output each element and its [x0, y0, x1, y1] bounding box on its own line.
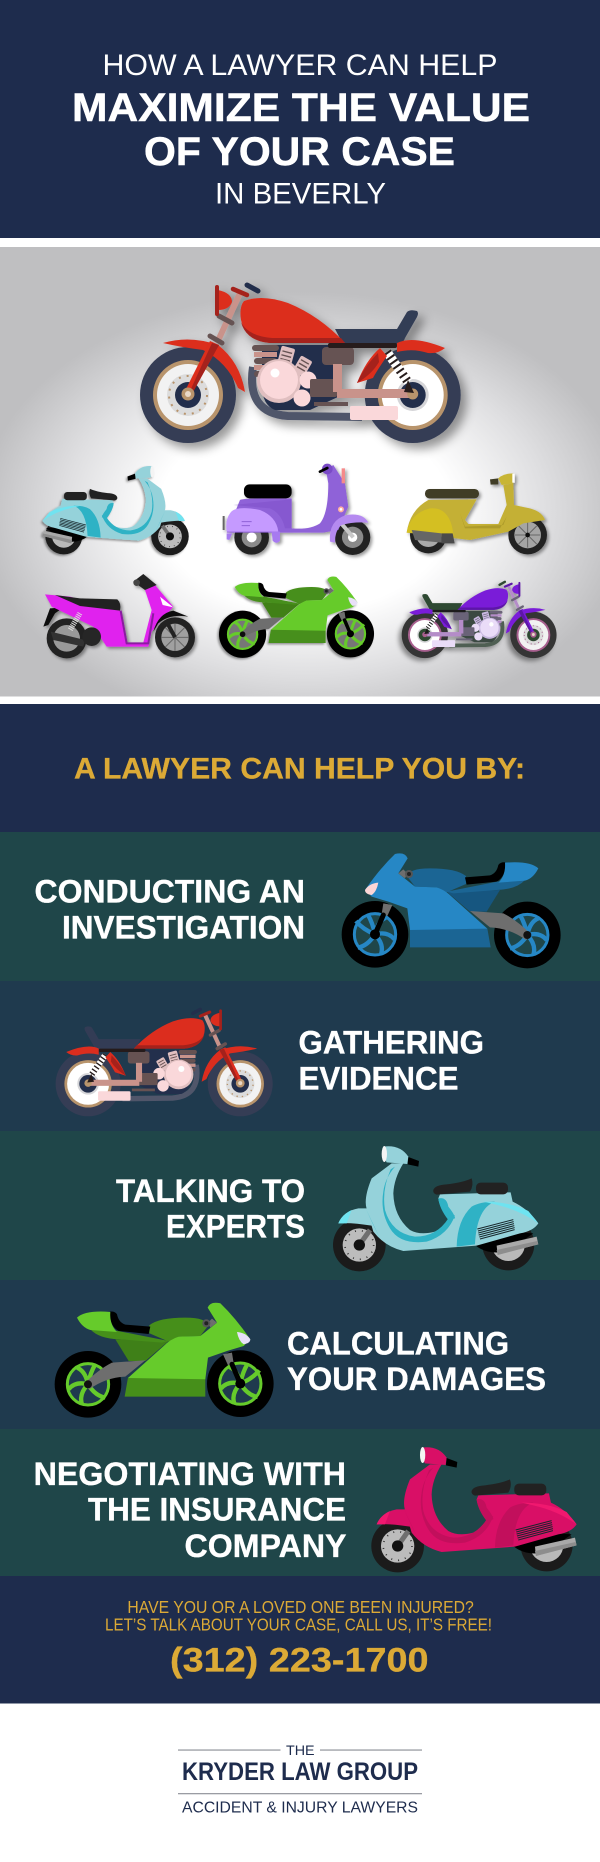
logo: the kryder law group: KRYDER LAW GROUP [182, 1758, 418, 1786]
phone number: (312) 223-1700 [170, 1642, 429, 1680]
icon: green sport bike [55, 1303, 274, 1418]
panel: hero with motorcycles [0, 247, 600, 696]
icon: magenta scooter [43, 574, 195, 658]
icon: teal scooter [42, 466, 189, 555]
panel: title header [0, 0, 600, 238]
icon: red cruiser motorcycle [140, 285, 461, 443]
text: THE INSURANCE [88, 1492, 346, 1528]
icon: blue sport bike [342, 853, 561, 968]
title line: maximize the value: MAXIMIZE THE VALUE [72, 86, 530, 130]
panel: a lawyer can help you by [0, 704, 600, 832]
icon: yellow scooter [407, 473, 547, 554]
panel: gathering evidence [0, 981, 600, 1131]
panel: calculating your damages [0, 1280, 600, 1429]
text: INVESTIGATION [62, 910, 305, 946]
panel: conducting an investigation [0, 832, 600, 981]
text: YOUR DAMAGES [287, 1361, 546, 1397]
logo: the kryder law group: ACCIDENT & INJURY LAWYERS [182, 1800, 418, 1817]
call to action text: LET’S TALK ABOUT YOUR CASE, CALL US, IT’S FREE! [105, 1614, 492, 1634]
text: CALCULATING [287, 1326, 509, 1362]
logo: the kryder law group: THE [286, 1742, 315, 1758]
logo: the kryder law group [178, 1742, 422, 1817]
title line: how a lawyer can help: HOW A LAWYER CAN HELP [102, 49, 498, 82]
panel: negotiating with the insurance company [0, 1429, 600, 1576]
text: EVIDENCE [298, 1061, 458, 1097]
icon: green sport bike [219, 576, 374, 658]
panel: talking to experts [0, 1131, 600, 1280]
text: COMPANY [184, 1528, 346, 1564]
text: EXPERTS [166, 1209, 305, 1245]
call to action text: HAVE YOU OR A LOVED ONE BEEN INJURED? [127, 1597, 474, 1617]
icon: teal scooter [333, 1146, 538, 1271]
panel: call to action [0, 1576, 600, 1704]
title line: in beverly: IN BEVERLY [215, 178, 386, 210]
icon: red cruiser motorcycle [56, 1009, 273, 1116]
text: GATHERING [298, 1024, 484, 1060]
title line: of your case: OF YOUR CASE [144, 130, 455, 174]
icon: purple scooter [223, 464, 370, 555]
icon: purple cruiser motorcycle [402, 582, 557, 658]
heading: A LAWYER CAN HELP YOU BY: [74, 752, 525, 786]
text: TALKING TO [116, 1173, 305, 1209]
text: NEGOTIATING WITH [34, 1456, 346, 1492]
text: CONDUCTING AN [34, 874, 305, 910]
icon: pink scooter [371, 1447, 577, 1572]
